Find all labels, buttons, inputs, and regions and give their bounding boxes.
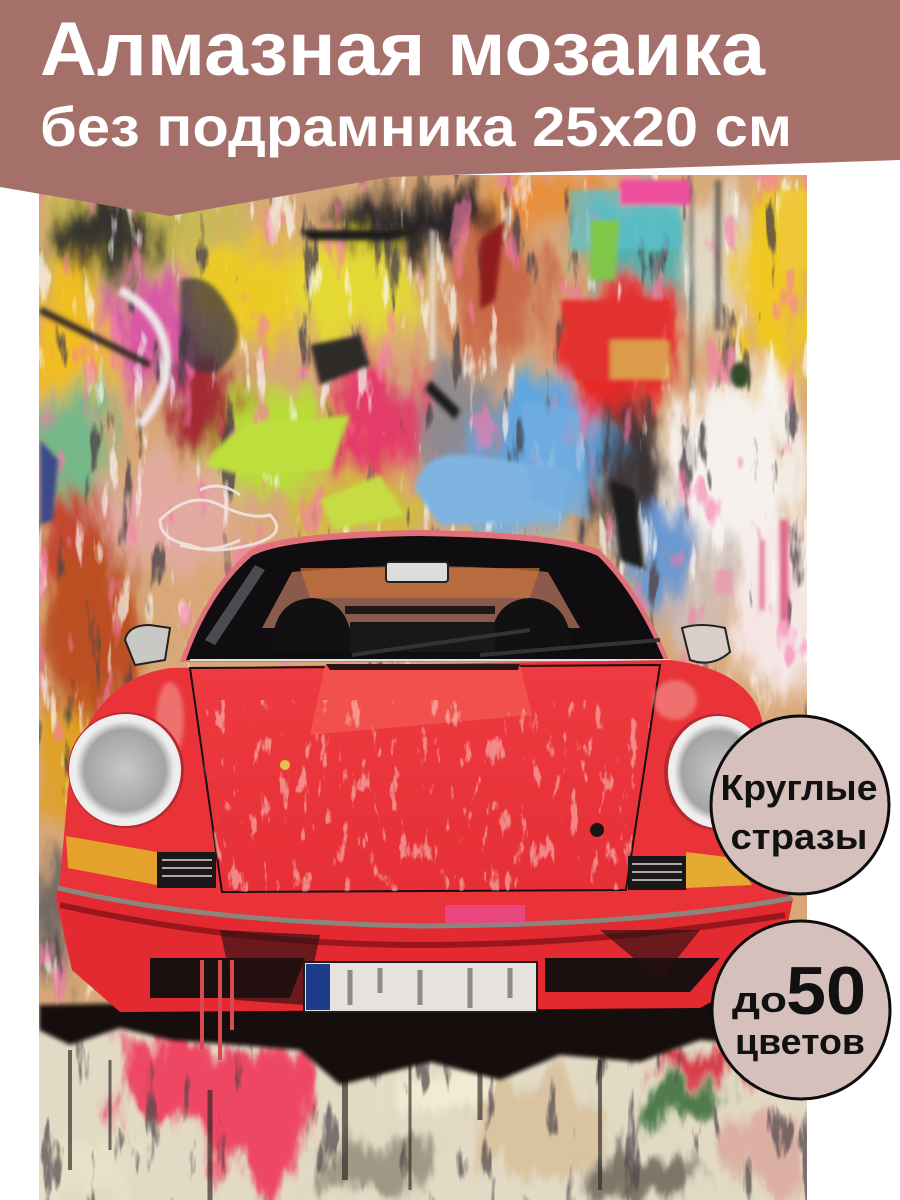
car body — [56, 660, 790, 974]
car — [56, 530, 793, 1060]
badge: up to 50 colours: до — [732, 979, 787, 1020]
title: Алмазная мозаика — [40, 7, 766, 92]
car roof and windshield — [180, 530, 670, 662]
hood — [190, 665, 660, 892]
left turn signal and grille — [66, 836, 216, 888]
graffiti wall background — [39, 175, 807, 1084]
floor with paint drips — [39, 990, 807, 1200]
badge: up to 50 colours: 50 — [786, 953, 866, 1029]
badge: round rhinestones — [711, 716, 889, 894]
paint drips from bumper — [202, 960, 232, 1060]
side mirrors — [125, 625, 730, 665]
badge: round rhinestones: Круглые — [720, 767, 878, 808]
picture: graffiti wall with red car — [30, 175, 820, 1200]
fender highlights — [156, 680, 697, 758]
badge: up to 50 colours: цветов — [735, 1021, 865, 1062]
left headlight — [68, 712, 184, 828]
front bumper — [56, 888, 793, 1012]
right turn signal and grille — [628, 852, 752, 890]
subtitle: без подрамника 25х20 см — [40, 95, 792, 158]
badge: round rhinestones: стразы — [730, 816, 868, 857]
badge: up to 50 colours — [712, 921, 890, 1099]
license plate — [304, 962, 537, 1012]
dark shadow under the car — [39, 1000, 718, 1088]
right headlight — [664, 714, 751, 830]
dark, white and pink paint splatter — [39, 175, 807, 1035]
hood paint speckles — [190, 700, 660, 895]
hood bulge — [310, 665, 532, 735]
header banner — [0, 0, 900, 216]
